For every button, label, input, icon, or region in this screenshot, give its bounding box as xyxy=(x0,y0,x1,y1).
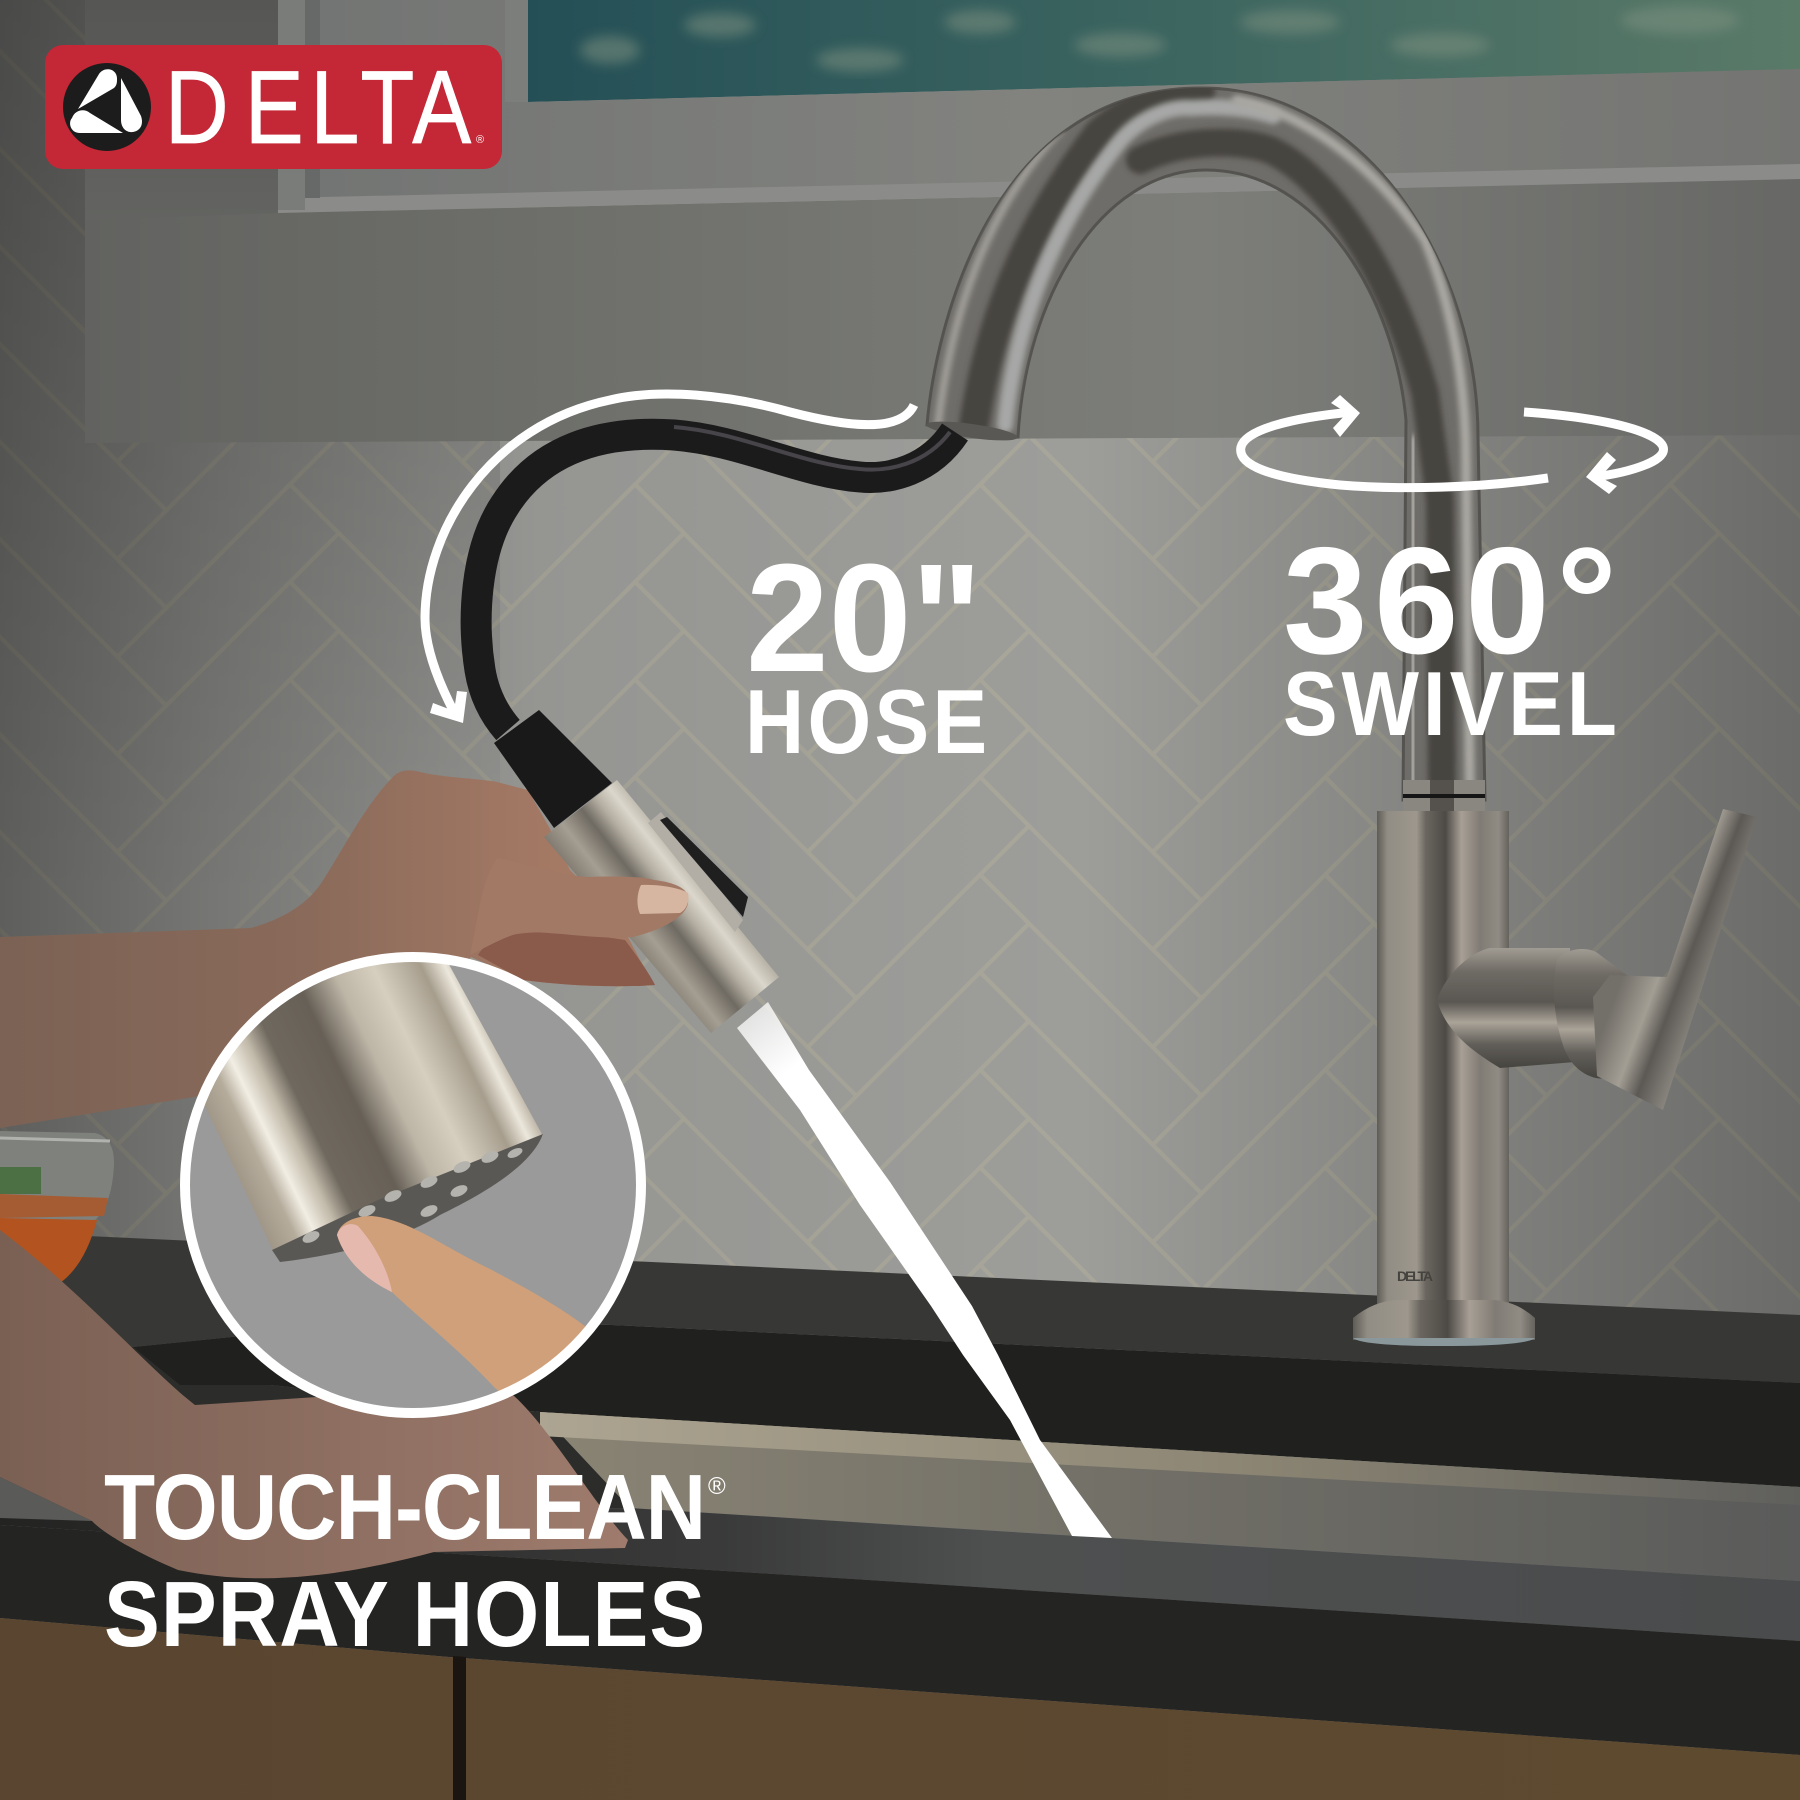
faucet body xyxy=(1353,780,1535,1346)
upper hand and forearm xyxy=(0,770,655,1128)
wordmark: DELTA xyxy=(165,50,472,166)
fingertip xyxy=(337,1216,590,1400)
water stream xyxy=(737,1002,1112,1538)
label line: spray holes: SPRAY HOLES xyxy=(104,1562,705,1666)
black braided pull-down hose xyxy=(476,427,955,730)
upper wall and window frame xyxy=(85,0,1800,443)
Delta logo xyxy=(45,45,502,169)
label: touch-clean spray holes xyxy=(104,1455,726,1666)
thumb on spray head xyxy=(470,858,689,955)
arrow: hose reach xyxy=(425,394,914,723)
glass bowl with sauce xyxy=(0,1131,114,1283)
lower fingers shadow xyxy=(478,932,655,986)
faucet body: DELTA xyxy=(1397,1268,1433,1284)
spray head close-up xyxy=(205,962,543,1257)
inset circle: touch-clean spray holes xyxy=(132,950,641,1413)
arrow: swivel right half xyxy=(1524,412,1664,494)
spray face with holes xyxy=(272,1134,543,1262)
label word: swivel: SWIVEL xyxy=(1283,654,1617,755)
countertop and sink xyxy=(0,1232,1800,1800)
faucet handle xyxy=(1437,809,1757,1110)
logo emblem xyxy=(63,63,151,151)
pull-down spray head xyxy=(494,710,779,1033)
registered mark: ® xyxy=(476,134,484,146)
window with trees xyxy=(528,0,1800,102)
arrow: swivel left half xyxy=(1241,395,1548,488)
faucet xyxy=(925,88,1757,1346)
label word: hose: HOSE xyxy=(745,672,987,773)
label: 20 inch hose: 20" xyxy=(746,532,982,704)
label: touch-clean spray holes: TOUCH-CLEAN xyxy=(104,1455,706,1559)
label: 360 degree swivel: 360° xyxy=(1283,516,1617,686)
lower hand and forearm xyxy=(0,1230,628,1578)
registered mark: ® xyxy=(708,1473,726,1500)
faucet arch spout xyxy=(925,88,1485,800)
